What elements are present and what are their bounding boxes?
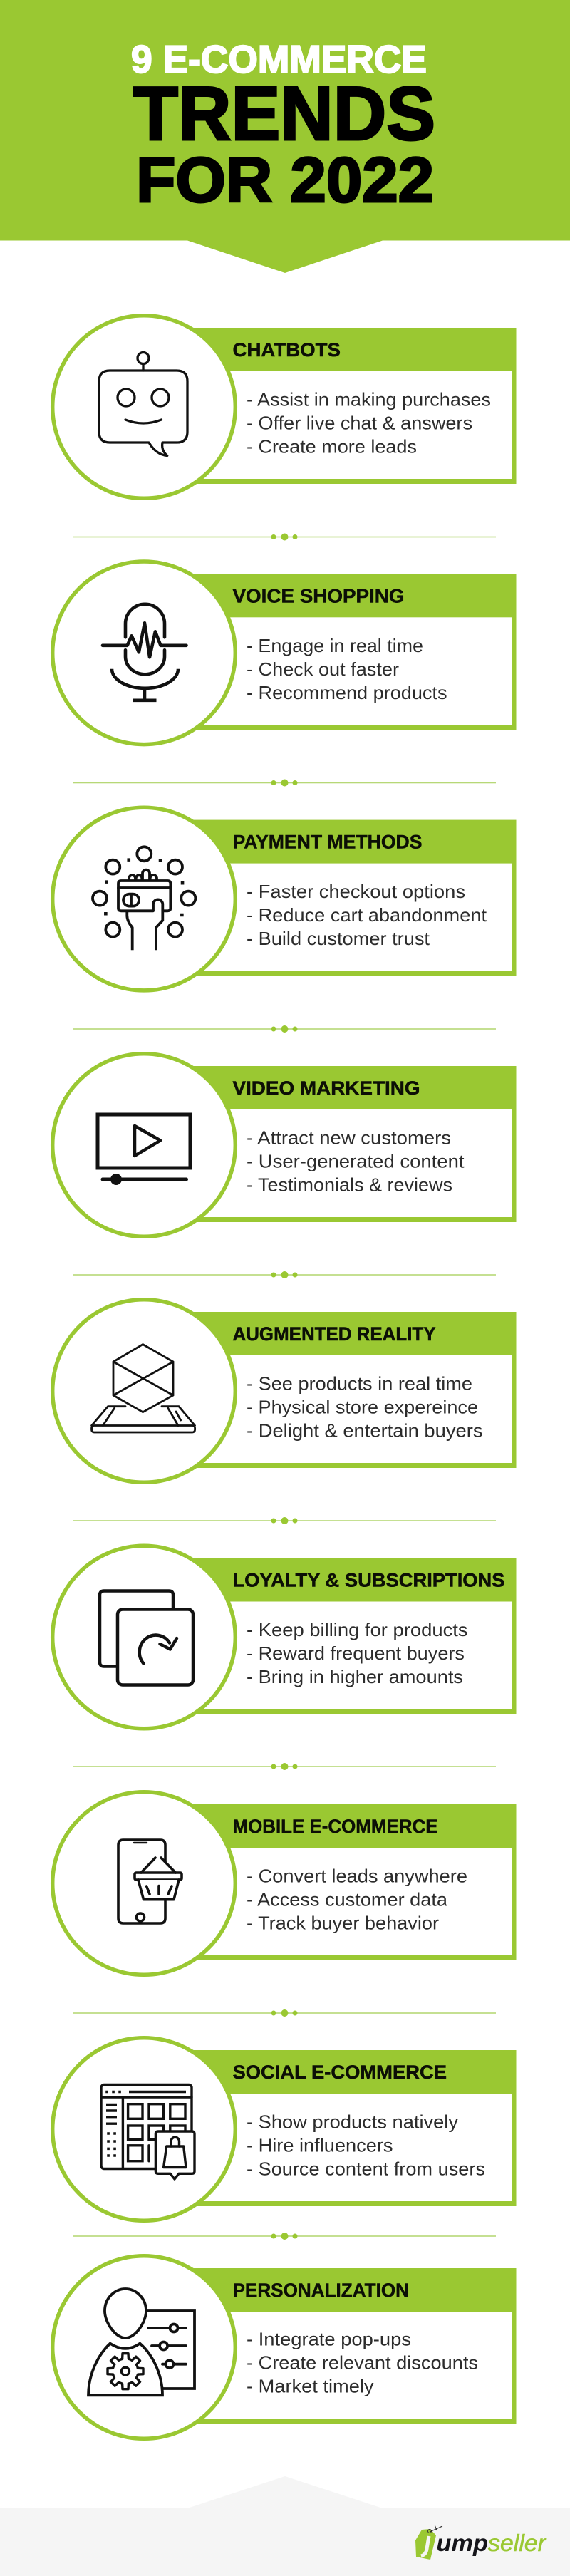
logo: jumpseller [415, 2525, 547, 2560]
bullet list: - Show products natively [247, 2111, 458, 2132]
bullet list [247, 1866, 467, 1934]
divider [73, 1517, 496, 1524]
bullet list: - Reward frequent buyers [247, 1643, 465, 1664]
icon: AR cube on phone [92, 1345, 195, 1432]
bullet list [247, 881, 487, 949]
bullet list: - Build customer trust [247, 928, 430, 949]
divider [73, 1271, 496, 1278]
bullet list: - User-generated content [247, 1150, 465, 1171]
bullet list: - See products in real time [247, 1372, 472, 1394]
panel: augmented reality [53, 1300, 516, 1482]
heading: MOBILE E-COMMERCE [232, 1816, 437, 1837]
logo: jumpseller: ump [436, 2530, 488, 2556]
bullet list [247, 635, 447, 703]
heading: AUGMENTED REALITY [232, 1323, 436, 1345]
heading: PERSONALIZATION [232, 2280, 409, 2301]
bullet list: - Delight & entertain buyers [247, 1419, 483, 1441]
divider [73, 2009, 496, 2017]
icon: recurring subscription cards [100, 1590, 193, 1685]
bullet list: - Keep billing for products [247, 1619, 468, 1640]
bullet list: - Engage in real time [247, 635, 423, 656]
icon: online shop window with bag [101, 2085, 195, 2179]
title line 2: TRENDS [133, 71, 435, 156]
panel: social e-commerce [53, 2038, 516, 2220]
bullet list [247, 2111, 485, 2179]
bullet list: - Physical store expereince [247, 1397, 478, 1418]
bullet list: - Testimonials & reviews [247, 1174, 452, 1196]
bullet list: - Check out faster [247, 658, 399, 680]
bullet list: - Assist in making purchases [247, 389, 491, 410]
bullet list: - Track buyer behavior [247, 1913, 439, 1934]
heading: VOICE SHOPPING [232, 585, 405, 606]
divider [73, 533, 496, 540]
bullet list: - Recommend products [247, 682, 447, 703]
panel: video marketing [53, 1054, 516, 1236]
logo: jumpseller: seller [488, 2530, 547, 2556]
panel: loyalty and subscriptions [53, 1546, 516, 1729]
bullet list [247, 389, 491, 457]
divider [73, 780, 496, 787]
heading: CHATBOTS [232, 339, 341, 361]
panel: payment methods [53, 807, 516, 990]
bullet list: - Market timely [247, 2376, 373, 2397]
icon: video player [98, 1114, 190, 1185]
icon: payment card in hand [93, 847, 195, 950]
bullet list: - Faster checkout options [247, 881, 465, 902]
heading: PAYMENT METHODS [232, 832, 422, 853]
bullet list: - Create more leads [247, 436, 417, 457]
divider [73, 1763, 496, 1770]
icon: user with settings [88, 2289, 195, 2395]
header banner [0, 0, 570, 273]
bullet list: - Hire influencers [247, 2135, 393, 2156]
bullet list: - Reduce cart abandonment [247, 904, 487, 926]
divider [73, 2233, 496, 2240]
bullet list: - Source content from users [247, 2158, 485, 2179]
heading: LOYALTY & SUBSCRIPTIONS [232, 1569, 504, 1590]
bullet list: - Offer live chat & answers [247, 412, 472, 433]
panel: personalization [53, 2256, 516, 2438]
footer band [0, 2476, 570, 2576]
bullet list: - Integrate pop-ups [247, 2329, 411, 2350]
bullet list [247, 1372, 483, 1441]
panel: chatbots [53, 316, 516, 498]
title line 1: 9 E-COMMERCE [131, 37, 427, 81]
bullet list [247, 1127, 465, 1196]
icon: microphone [103, 604, 187, 700]
heading: SOCIAL E-COMMERCE [232, 2062, 447, 2083]
title line 3: FOR 2022 [136, 144, 434, 215]
bullet list [247, 1619, 468, 1687]
bullet list: - Access customer data [247, 1888, 448, 1910]
icon: robot [99, 352, 187, 456]
icon: phone with basket [118, 1840, 182, 1923]
bullet list: - Convert leads anywhere [247, 1866, 467, 1887]
divider [73, 1025, 496, 1033]
panel: mobile e-commerce [53, 1792, 516, 1975]
bullet list: - Attract new customers [247, 1127, 451, 1149]
bullet list: - Bring in higher amounts [247, 1666, 463, 1687]
panel: voice shopping [53, 562, 516, 745]
bullet list [247, 2329, 478, 2397]
bullet list: - Create relevant discounts [247, 2352, 478, 2373]
heading: VIDEO MARKETING [232, 1077, 420, 1099]
